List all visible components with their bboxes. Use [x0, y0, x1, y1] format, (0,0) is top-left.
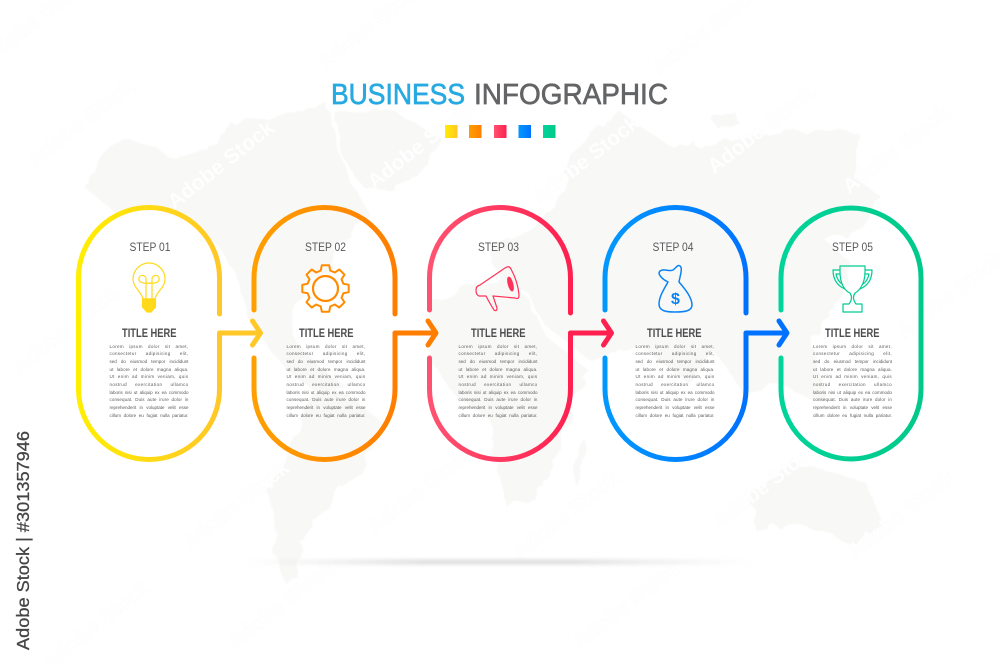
stock watermark: Adobe Stock [363, 96, 479, 193]
text block: step 1: Ut enim ad minim veniam, quis [110, 374, 188, 379]
text block: step 1: Lorem ipsum dolor sit amet, [110, 344, 188, 348]
step 5 outline [781, 208, 921, 459]
text block: step 5: nostrud exercitation ullamco [813, 382, 892, 387]
text block: step 5: cillum dolore eu fugiat nulla pariatur. [813, 413, 892, 418]
text block: step 4: consectetur adipisicing elit, [636, 351, 714, 356]
title labels: TITLE HERE [122, 328, 177, 340]
text block: step 2: sed do eiusmod tempor incididunt [286, 359, 366, 364]
text block: step 5: consectetur adipisicing elit, [813, 351, 892, 356]
stock watermark: Adobe Stock [843, 466, 959, 563]
text block: step 2: laboris nisi ut aliquip ex ea commodo [286, 390, 366, 395]
text block: step 5: sed do eiusmod tempor incididunt [813, 359, 892, 364]
stock id: Adobe Stock | #301357946 [13, 431, 33, 650]
step labels: STEP 04 [652, 240, 694, 254]
stock watermark: Adobe Stock [178, 456, 294, 553]
world map background [87, 103, 882, 588]
text block: step 2 [286, 344, 366, 418]
text block: step 5: consequat. Duis aute irure dolor in [813, 397, 892, 402]
text block: step 3: Lorem ipsum dolor sit amet, [458, 344, 538, 348]
stock watermark: Adobe Stock [363, 441, 479, 538]
text block: step 2: Lorem ipsum dolor sit amet, [286, 344, 366, 348]
text block: step 4: sed do eiusmod tempor incididunt [636, 359, 714, 364]
text block: step 3: sed do eiusmod tempor incididunt [458, 359, 538, 364]
icon: light bulb [133, 263, 165, 312]
text block: step 3: nostrud exercitation ullamco [458, 382, 538, 387]
text block: step 5: Ut enim ad minim veniam, quis [813, 374, 892, 379]
text block: step 2: consequat. Duis aute irure dolor in [286, 397, 366, 402]
stock watermark: Adobe Stock [708, 436, 824, 533]
text block: step 5: ut labore et dolore magna aliqua. [813, 367, 892, 372]
text block: step 3: consequat. Duis aute irure dolor in [458, 397, 538, 402]
text block: step 1: ut labore et dolore magna aliqua. [110, 367, 188, 372]
text block: step 3 [458, 344, 538, 418]
text block: step 2: ut labore et dolore magna aliqua. [286, 367, 366, 372]
text block: step 2: consectetur adipisicing elit, [286, 351, 366, 356]
stock watermark: Adobe Stock [23, 74, 139, 171]
title [331, 79, 668, 111]
text block: step 3: cillum dolore eu fugiat nulla pariatur. [458, 413, 538, 418]
ground shadow [240, 560, 755, 564]
text block: step 5: laboris nisi ut aliquip ex ea commodo [813, 390, 892, 395]
step 1 outline and arrow [78, 208, 260, 459]
step 4 outline and arrow [605, 208, 787, 459]
text block: step 1: cillum dolore eu fugiat nulla pariatur. [110, 413, 188, 418]
text block: step 4: reprehenderit in voluptate velit esse [636, 405, 714, 410]
icon: money bag [659, 265, 692, 312]
text block: step 3: consectetur adipisicing elit, [458, 351, 538, 356]
text block: step 3: Ut enim ad minim veniam, quis [458, 374, 538, 379]
text block: step 5: reprehenderit in voluptate velit esse [813, 405, 892, 410]
text block: step 1: sed do eiusmod tempor incididunt [110, 359, 188, 364]
stock watermark: Adobe Stock [528, 111, 644, 208]
text block: step 1 [110, 344, 188, 418]
text block: step 4: Ut enim ad minim veniam, quis [636, 374, 714, 379]
step labels [130, 240, 873, 254]
step labels: STEP 02 [305, 240, 346, 254]
title labels: TITLE HERE [299, 328, 354, 340]
stock watermark: Adobe Stock [568, 556, 684, 653]
text block: step 5: Lorem ipsum dolor sit amet, [813, 344, 892, 348]
text block: step 4: laboris nisi ut aliquip ex ea commodo [636, 390, 714, 395]
icon: megaphone [476, 267, 519, 311]
text block: step 1: consequat. Duis aute irure dolor in [110, 397, 188, 402]
text block: step 2: cillum dolore eu fugiat nulla pariatur. [286, 413, 366, 418]
stock watermark: Adobe Stock [508, 466, 624, 563]
stock watermark: Adobe Stock [838, 101, 954, 198]
title labels [122, 328, 880, 340]
text block: step 1: reprehenderit in voluptate velit esse [110, 405, 188, 410]
colour key squares [445, 125, 556, 138]
stock watermark: Adobe Stock [8, 281, 124, 378]
text block: step 2: Ut enim ad minim veniam, quis [286, 374, 366, 379]
stock watermark: Adobe Stock [223, 556, 339, 653]
step labels: STEP 03 [478, 240, 519, 254]
stock watermark: Adobe Stock [703, 81, 819, 178]
step 2 outline and arrow [254, 208, 436, 459]
text block: step 2: reprehenderit in voluptate velit esse [286, 405, 366, 410]
text block: step 4: Lorem ipsum dolor sit amet, [636, 344, 714, 348]
text block: step 4 [636, 344, 714, 418]
step labels: STEP 05 [832, 240, 873, 254]
stock watermark: Adobe Stock [163, 116, 279, 213]
text block: step 4: nostrud exercitation ullamco [636, 382, 714, 387]
text block: step 4: ut labore et dolore magna aliqua. [636, 367, 714, 372]
text block: step 3: laboris nisi ut aliquip ex ea commodo [458, 390, 538, 395]
text block: step 3: ut labore et dolore magna aliqua. [458, 367, 538, 372]
title labels: TITLE HERE [471, 328, 526, 340]
icon: gear [302, 265, 349, 312]
title labels: TITLE HERE [825, 328, 880, 340]
text block: step 4: consequat. Duis aute irure dolor in [636, 397, 714, 402]
step 3 outline and arrow [430, 208, 612, 459]
icon: trophy [833, 266, 872, 312]
title word: infographic: INFOGRAPHIC [474, 79, 668, 111]
icon: money bag: $ [671, 291, 680, 308]
text block: step 4: cillum dolore eu fugiat nulla pariatur. [636, 413, 714, 418]
text block: step 1: laboris nisi ut aliquip ex ea commodo [110, 390, 188, 395]
text block: step 1: nostrud exercitation ullamco [110, 382, 188, 387]
text block: step 3: reprehenderit in voluptate velit esse [458, 405, 538, 410]
title word: business: BUSINESS [331, 79, 465, 111]
title labels: TITLE HERE [647, 328, 702, 340]
text block: step 5 [813, 344, 892, 418]
text block: step 2: nostrud exercitation ullamco [286, 382, 366, 387]
step labels: STEP 01 [130, 240, 171, 254]
text block: step 1: consectetur adipisicing elit, [110, 351, 188, 356]
